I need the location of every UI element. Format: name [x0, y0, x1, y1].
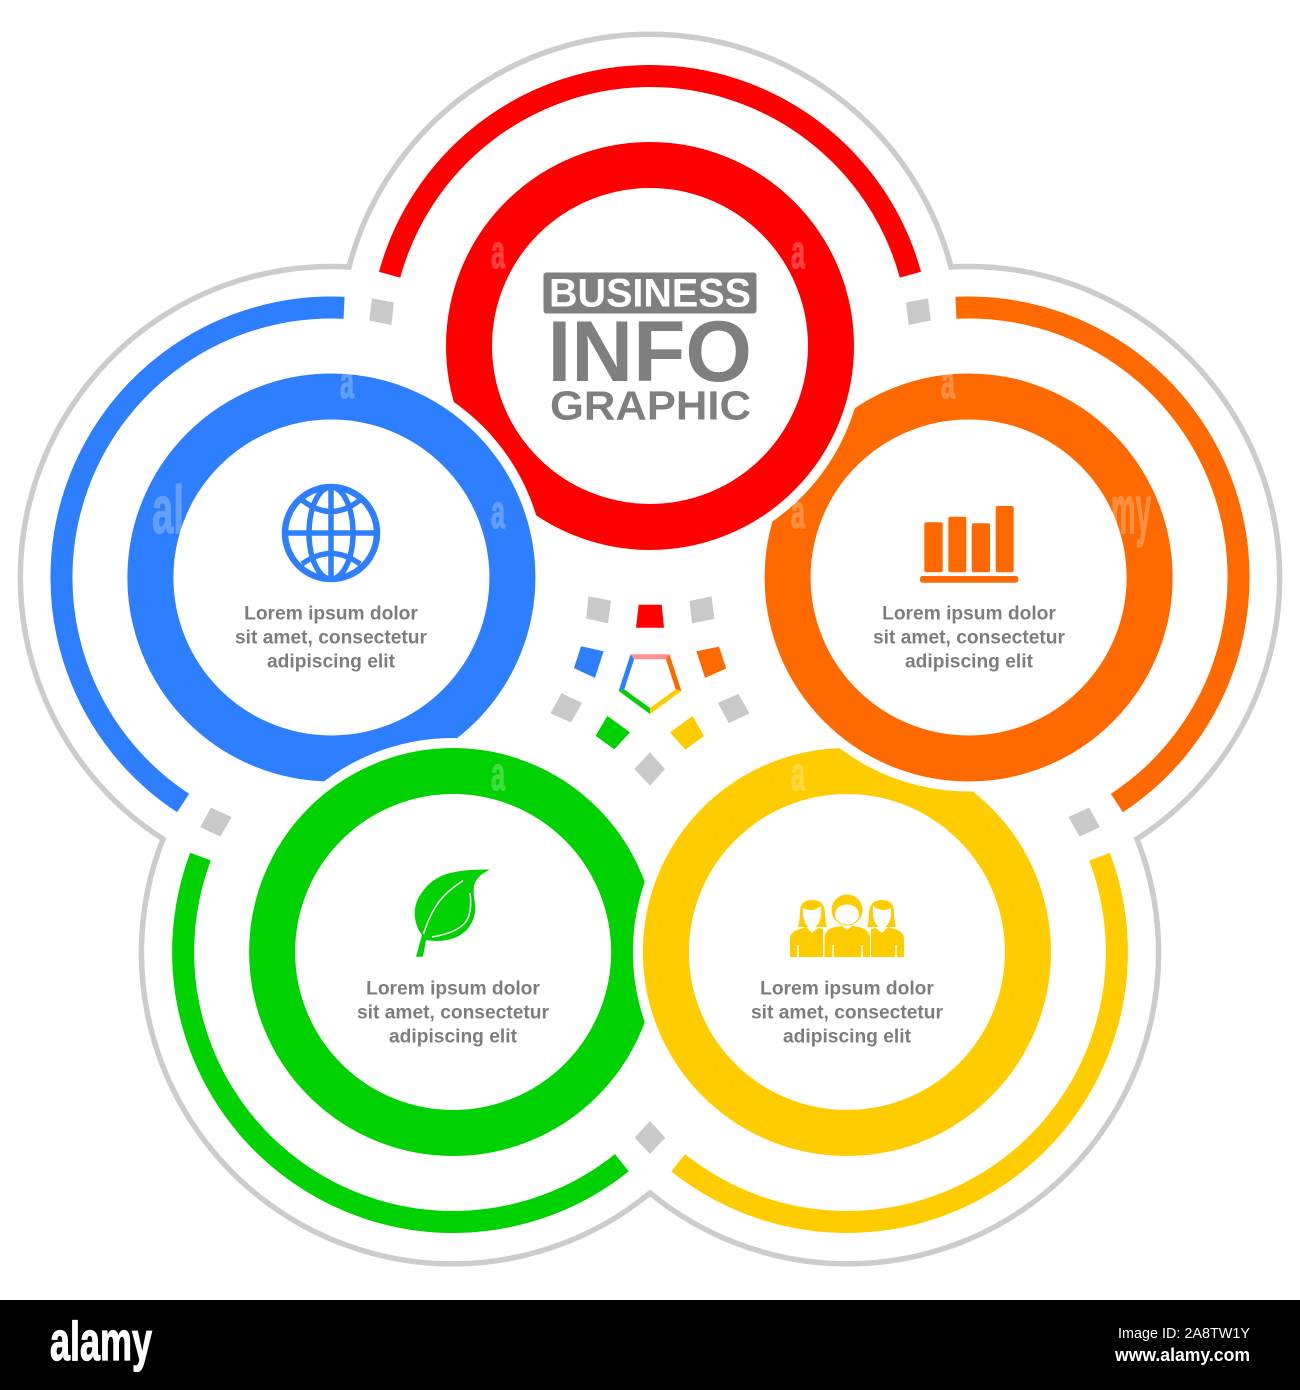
icon: globe [285, 487, 377, 579]
icon: bar chart [920, 506, 1018, 583]
text: my [1111, 472, 1151, 548]
red outer arc [390, 76, 910, 275]
title: BUSINESS: BUSINESS [549, 272, 751, 316]
blue text block: Lorem ipsum dolor [244, 604, 418, 624]
orange outer arc [956, 246, 1300, 803]
title: GRAPHIC: GRAPHIC [550, 382, 751, 428]
blue text block [235, 604, 427, 672]
yellow outer arc [678, 857, 1216, 1323]
panel: red title circle [390, 76, 910, 527]
orange text block: sit amet, consectetur [873, 628, 1065, 648]
icon: leaf [415, 869, 490, 957]
center: outer gray squares [546, 587, 754, 786]
orange text block: Lorem ipsum dolor [882, 604, 1056, 624]
watermark letters over rings: a [491, 485, 505, 538]
red ring [469, 165, 831, 527]
watermark letters over rings: a [941, 355, 955, 408]
orange ring [788, 396, 1150, 758]
blue outer arc [0, 246, 344, 803]
panel: orange step [764, 296, 1250, 812]
gray connector squares between outer arcs [195, 289, 1105, 1154]
blue text block: sit amet, consectetur [235, 628, 427, 648]
orange text block: adipiscing elit [905, 652, 1034, 672]
footer bar [0, 1300, 1300, 1390]
yellow text block: Lorem ipsum dolor [760, 978, 934, 1000]
center: five-colored pentagon [619, 654, 681, 714]
yellow text block: sit amet, consectetur [751, 1002, 943, 1024]
title badge background [544, 272, 756, 314]
icon: people [790, 894, 904, 957]
panel: yellow step [642, 748, 1128, 1233]
watermark letters over rings: a [491, 747, 505, 800]
panel: green step [172, 748, 645, 1233]
green ring [272, 771, 634, 1133]
green text block: adipiscing elit [389, 1026, 518, 1048]
footer logo: alamy [50, 1310, 152, 1372]
green outer arc [84, 857, 622, 1323]
green text block: Lorem ipsum dolor [366, 978, 540, 1000]
panel: blue step [50, 296, 536, 812]
green text block [357, 978, 549, 1048]
blue ring [150, 396, 512, 758]
watermark letters over rings: a [791, 485, 805, 538]
yellow text block [751, 978, 943, 1048]
yellow text block: adipiscing elit [783, 1026, 912, 1048]
orange text block [873, 604, 1065, 672]
watermark letters over rings: a [791, 747, 805, 800]
green text block: sit amet, consectetur [357, 1002, 549, 1024]
center: colored markers [573, 605, 727, 751]
watermark letters over rings: a [791, 225, 805, 278]
watermark letters over rings: al [152, 472, 184, 548]
blue text block: adipiscing elit [267, 652, 396, 672]
footer image id: Image ID: 2A8TW1Y [1118, 1325, 1250, 1342]
watermark letters over rings: a [491, 225, 505, 278]
watermark letters over rings: a [340, 355, 354, 408]
watermark letters over rings [152, 225, 1151, 800]
title: INFO: INFO [548, 304, 752, 400]
yellow ring [666, 771, 1028, 1133]
footer url: www.alamy.com [1114, 1345, 1250, 1365]
